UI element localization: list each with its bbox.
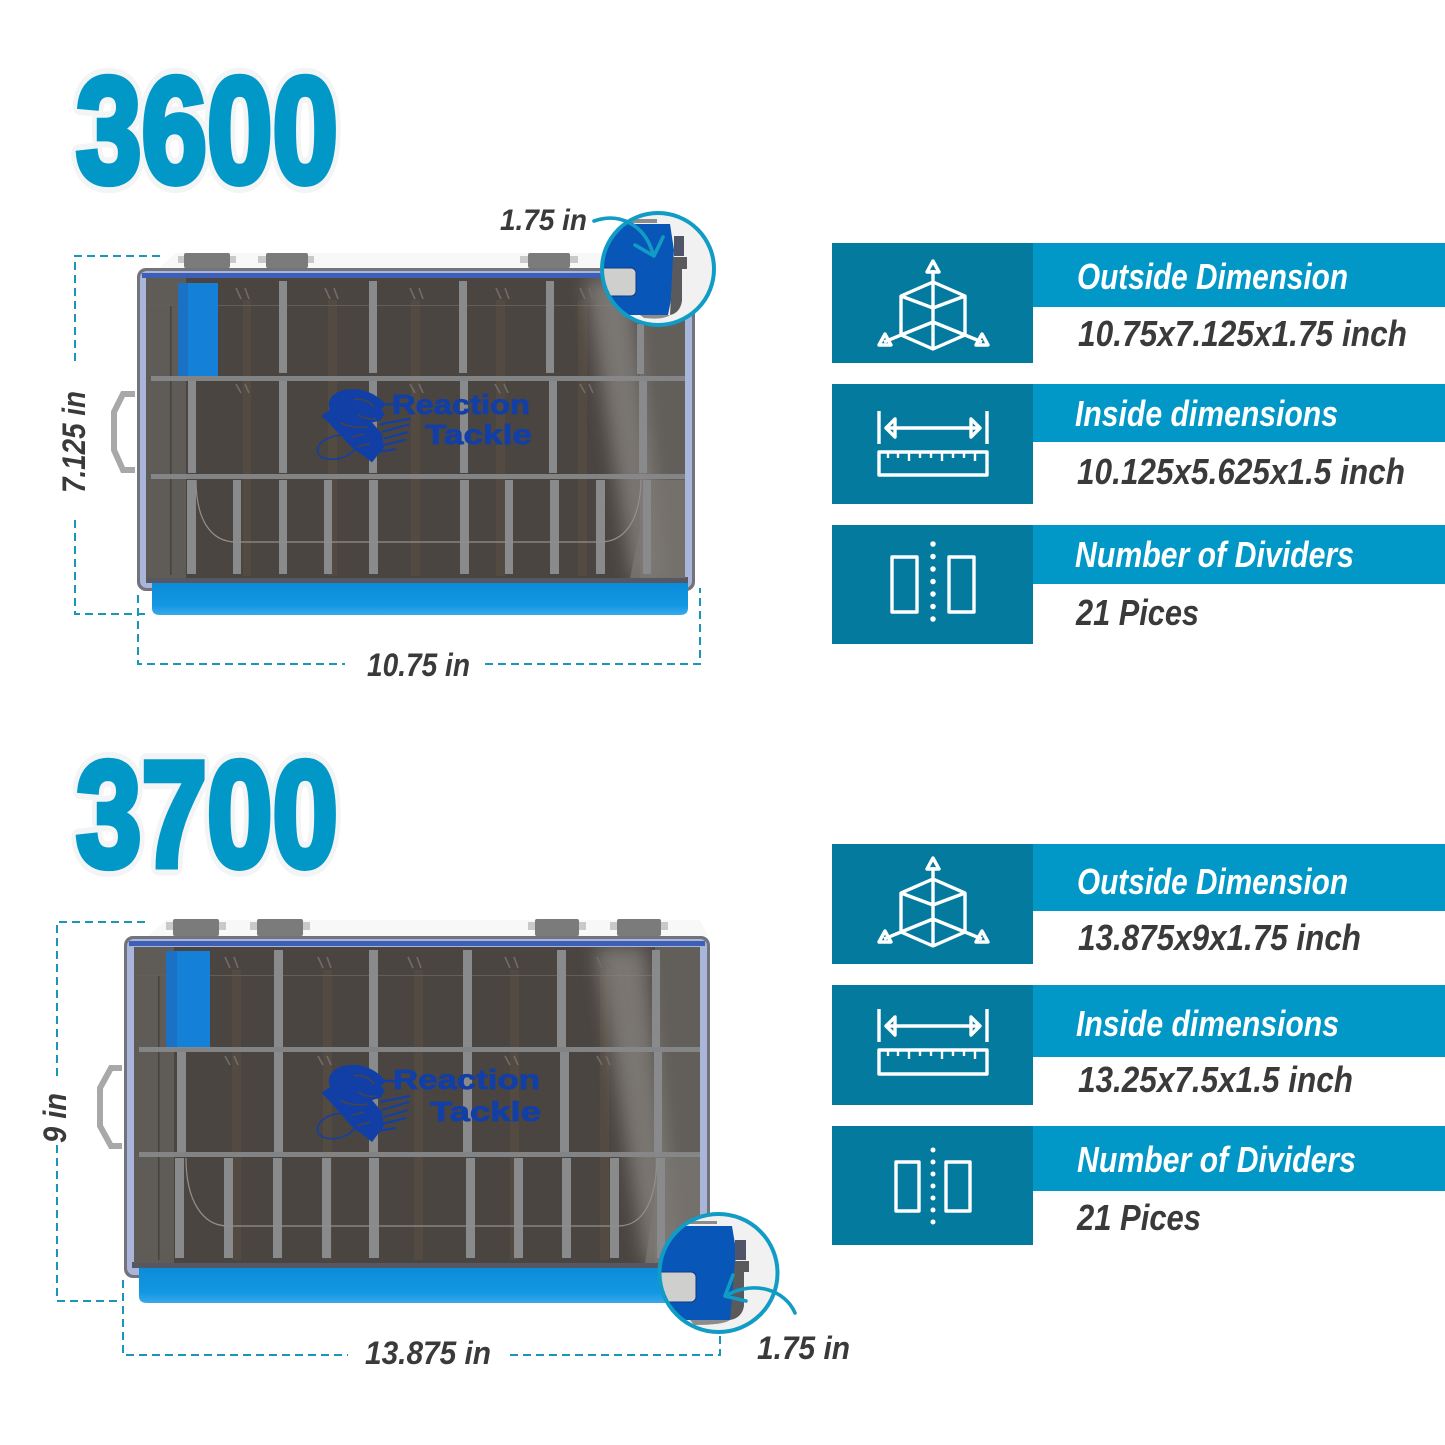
icon: ruler	[879, 1009, 987, 1074]
lid curve	[186, 1158, 657, 1226]
panel: 3600 number of dividers: Number of Dividers	[1075, 534, 1354, 575]
logo fish	[315, 389, 410, 463]
callout: 3600 depth	[594, 213, 714, 325]
label: 13.875 in: 13.875 in	[365, 1335, 491, 1371]
panel: 3600 number of dividers	[832, 525, 1445, 644]
dimension lines: 3600	[75, 256, 700, 664]
label: 1.75 in: 1.75 in	[757, 1330, 850, 1366]
icon: dividers	[896, 1150, 970, 1224]
panel: 3600 outside dimension: Outside Dimension	[1077, 256, 1348, 297]
blue insert	[177, 951, 210, 1048]
arrow	[725, 1275, 795, 1313]
panel: 3600 inside dimensions	[832, 384, 1445, 504]
panel: 3600 number of dividers: 21 Pices	[1075, 592, 1199, 633]
logo fish	[315, 1065, 410, 1143]
logo	[315, 1064, 541, 1143]
logo	[315, 389, 532, 463]
hinges	[158, 253, 694, 268]
logo: Reaction	[393, 1064, 540, 1095]
interior	[134, 947, 705, 1263]
handle	[100, 1068, 122, 1146]
panel: 3700 inside dimensions	[832, 985, 1445, 1105]
dividers	[151, 281, 685, 574]
interior	[146, 278, 690, 578]
product photo: 3700 tackle box	[100, 919, 710, 1303]
label: 9 in: 9 in	[37, 1093, 73, 1143]
case body	[137, 268, 695, 591]
title: model 3600: 3600	[76, 46, 338, 214]
panel: 3700 outside dimension: Outside Dimension	[1077, 861, 1348, 902]
blue base bar	[139, 1268, 690, 1303]
panel: 3600 outside dimension: 10.75x7.125x1.75 inch	[1078, 313, 1407, 354]
panel: 3700 number of dividers: Number of Dividers	[1077, 1139, 1356, 1180]
logo: Reaction	[392, 389, 530, 420]
title: model 3700: 3700	[76, 730, 338, 898]
panel: 3700 inside dimensions: 13.25x7.5x1.5 inch	[1078, 1059, 1353, 1100]
reflection	[655, 947, 700, 1158]
panel: 3700 number of dividers	[832, 1126, 1445, 1245]
icon: cube	[879, 858, 988, 946]
dimension lines: 3700	[57, 922, 720, 1355]
reflection	[640, 320, 685, 483]
blue insert	[188, 283, 218, 376]
case body	[124, 936, 710, 1278]
clip marks	[236, 288, 593, 393]
dividers	[139, 950, 700, 1258]
panel: 3700 outside dimension: 13.875x9x1.75 inch	[1078, 917, 1361, 958]
panel: 3700 outside dimension	[832, 844, 1445, 964]
label: 7.125 in: 7.125 in	[56, 391, 92, 493]
clip marks	[225, 957, 610, 1065]
panel: 3600 outside dimension	[832, 243, 1445, 363]
icon: dividers	[892, 544, 974, 626]
title: model 3600: 3600	[76, 46, 338, 214]
logo: Tackle	[425, 419, 532, 450]
title: model 3700: 3700	[76, 730, 338, 898]
label: 1.75 in: 1.75 in	[500, 204, 587, 237]
arrow	[594, 218, 663, 256]
blue base bar	[152, 583, 688, 615]
icon: ruler	[879, 411, 987, 475]
panel: 3700 number of dividers: 21 Pices	[1076, 1197, 1201, 1238]
product photo: 3600 tackle box	[114, 253, 695, 615]
handle	[114, 394, 135, 470]
hinges	[148, 919, 708, 936]
label: 10.75 in: 10.75 in	[367, 647, 470, 683]
panel: 3700 inside dimensions: Inside dimensions	[1076, 1003, 1339, 1044]
lid curve	[196, 480, 641, 542]
icon: cube	[879, 261, 988, 349]
logo: Tackle	[430, 1096, 541, 1127]
panel: 3600 inside dimensions: 10.125x5.625x1.5 inch	[1077, 451, 1405, 492]
callout: 3700 depth	[653, 1214, 795, 1332]
panel: 3600 inside dimensions: Inside dimensions	[1075, 393, 1338, 434]
